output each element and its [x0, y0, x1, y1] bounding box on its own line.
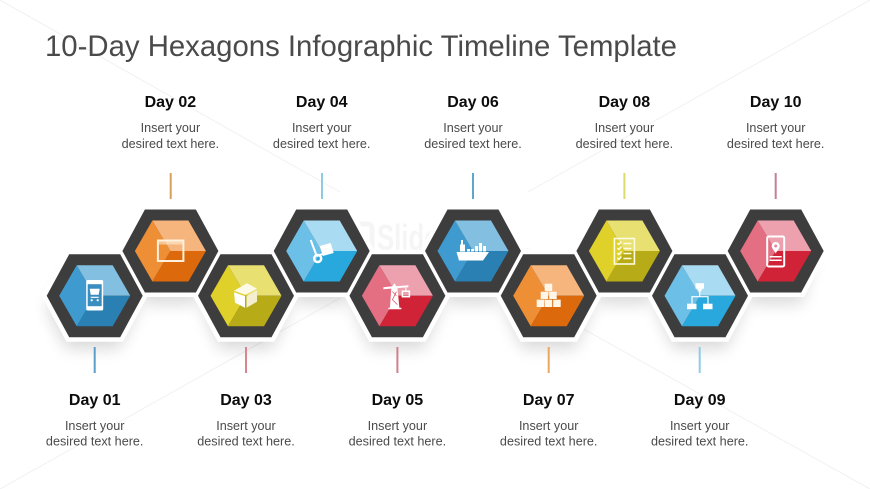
icon: phone with map pin: [767, 236, 784, 266]
text: Day 04: Insert your: [292, 121, 351, 135]
text: Day 05: Insert your: [368, 419, 427, 433]
text: Day 07: [500, 392, 597, 448]
icon: stacked boxes: [537, 284, 561, 307]
hexagon: Day 07: [501, 254, 597, 337]
watermark: SlideModel: [377, 217, 513, 258]
text: Day 09: Day 09: [674, 392, 726, 409]
panel: Day 01: [46, 254, 143, 448]
panel: Day 05: [349, 254, 446, 448]
text: Day 08: desired text here.: [576, 137, 673, 151]
connector: Day 10: [775, 173, 777, 199]
icon: crane: [383, 283, 409, 309]
text: Day 08: Day 08: [599, 94, 650, 111]
text: Day 09: desired text here.: [651, 434, 748, 448]
text: Day 10: Insert your: [746, 121, 805, 135]
hexagon: Day 02: [122, 210, 218, 292]
connector: Day 02: [170, 173, 172, 199]
hexagon: Day 09: [652, 254, 748, 337]
text: Day 06: desired text here.: [424, 137, 522, 151]
panel: Day 08: [576, 94, 673, 292]
text: Day 01: [46, 392, 143, 448]
icon: hand truck: [311, 240, 334, 262]
watermark: .com: [513, 245, 531, 254]
text: Day 06: Day 06: [447, 94, 499, 111]
text: Day 02: desired text here.: [122, 137, 219, 151]
icon: cargo ship: [456, 240, 489, 260]
text: Day 05: [349, 392, 446, 448]
panel: Day 06: [424, 94, 522, 292]
icon: flowchart: [687, 283, 712, 309]
panel: Day 07: [500, 254, 597, 448]
text: Day 06: [424, 94, 522, 151]
icon: checklist: [614, 238, 634, 264]
text: Day 08: [576, 94, 673, 151]
panel: Day 10: [727, 94, 824, 292]
connector: Day 03: [245, 347, 247, 373]
hexagon: Day 06: [425, 210, 521, 292]
panel: Day 02: [122, 94, 219, 292]
text: Day 03: Day 03: [220, 392, 272, 409]
connector: Day 05: [396, 347, 398, 373]
hexagon: Day 01: [47, 254, 143, 337]
text: Day 07: Day 07: [523, 392, 575, 409]
text: Day 01: desired text here.: [46, 434, 143, 448]
text: Day 04: Day 04: [296, 94, 348, 111]
text: Day 04: desired text here.: [273, 137, 370, 151]
text: Day 02: [122, 94, 219, 151]
panel: Day 09: [651, 254, 748, 448]
hexagon: Day 04: [274, 210, 370, 292]
icon: shopping phone: [86, 280, 103, 310]
title: 10-Day Hexagons Infographic Timeline Template: [45, 30, 677, 63]
text: Day 01: Day 01: [69, 392, 121, 409]
text: Day 03: desired text here.: [197, 434, 295, 448]
connector: Day 06: [472, 173, 474, 199]
text: Day 05: desired text here.: [349, 434, 446, 448]
text: Day 10: Day 10: [750, 94, 802, 111]
icon: browser window: [158, 240, 183, 261]
text: Day 07: desired text here.: [500, 434, 597, 448]
hexagon: Day 10: [728, 210, 824, 292]
text: Day 10: desired text here.: [727, 137, 824, 151]
text: Day 03: Insert your: [216, 419, 276, 433]
connector: Day 09: [699, 347, 701, 373]
text: Day 03: [197, 392, 295, 448]
text: Day 02: Insert your: [141, 121, 200, 135]
panel: Day 03: [197, 254, 295, 448]
text: Day 10: [727, 94, 824, 151]
connector: Day 07: [548, 347, 550, 373]
watermark: [338, 217, 531, 258]
panel: Day 04: [273, 94, 370, 292]
text: Day 07: Insert your: [519, 419, 578, 433]
hexagon: Day 03: [198, 254, 294, 337]
text: Day 02: Day 02: [145, 94, 196, 111]
text: Day 08: Insert your: [595, 121, 654, 135]
connector: Day 08: [623, 173, 625, 199]
connector: Day 04: [321, 173, 323, 199]
icon: package box: [234, 283, 257, 308]
text: Day 01: Insert your: [65, 419, 124, 433]
hexagon: Day 08: [576, 210, 672, 292]
text: Day 09: [651, 392, 748, 448]
text: Day 06: Insert your: [443, 121, 503, 135]
text: Day 04: [273, 94, 370, 151]
hexagon: Day 05: [349, 254, 445, 337]
text: Day 05: Day 05: [372, 392, 423, 409]
connector: Day 01: [94, 347, 96, 373]
text: Day 09: Insert your: [670, 419, 729, 433]
